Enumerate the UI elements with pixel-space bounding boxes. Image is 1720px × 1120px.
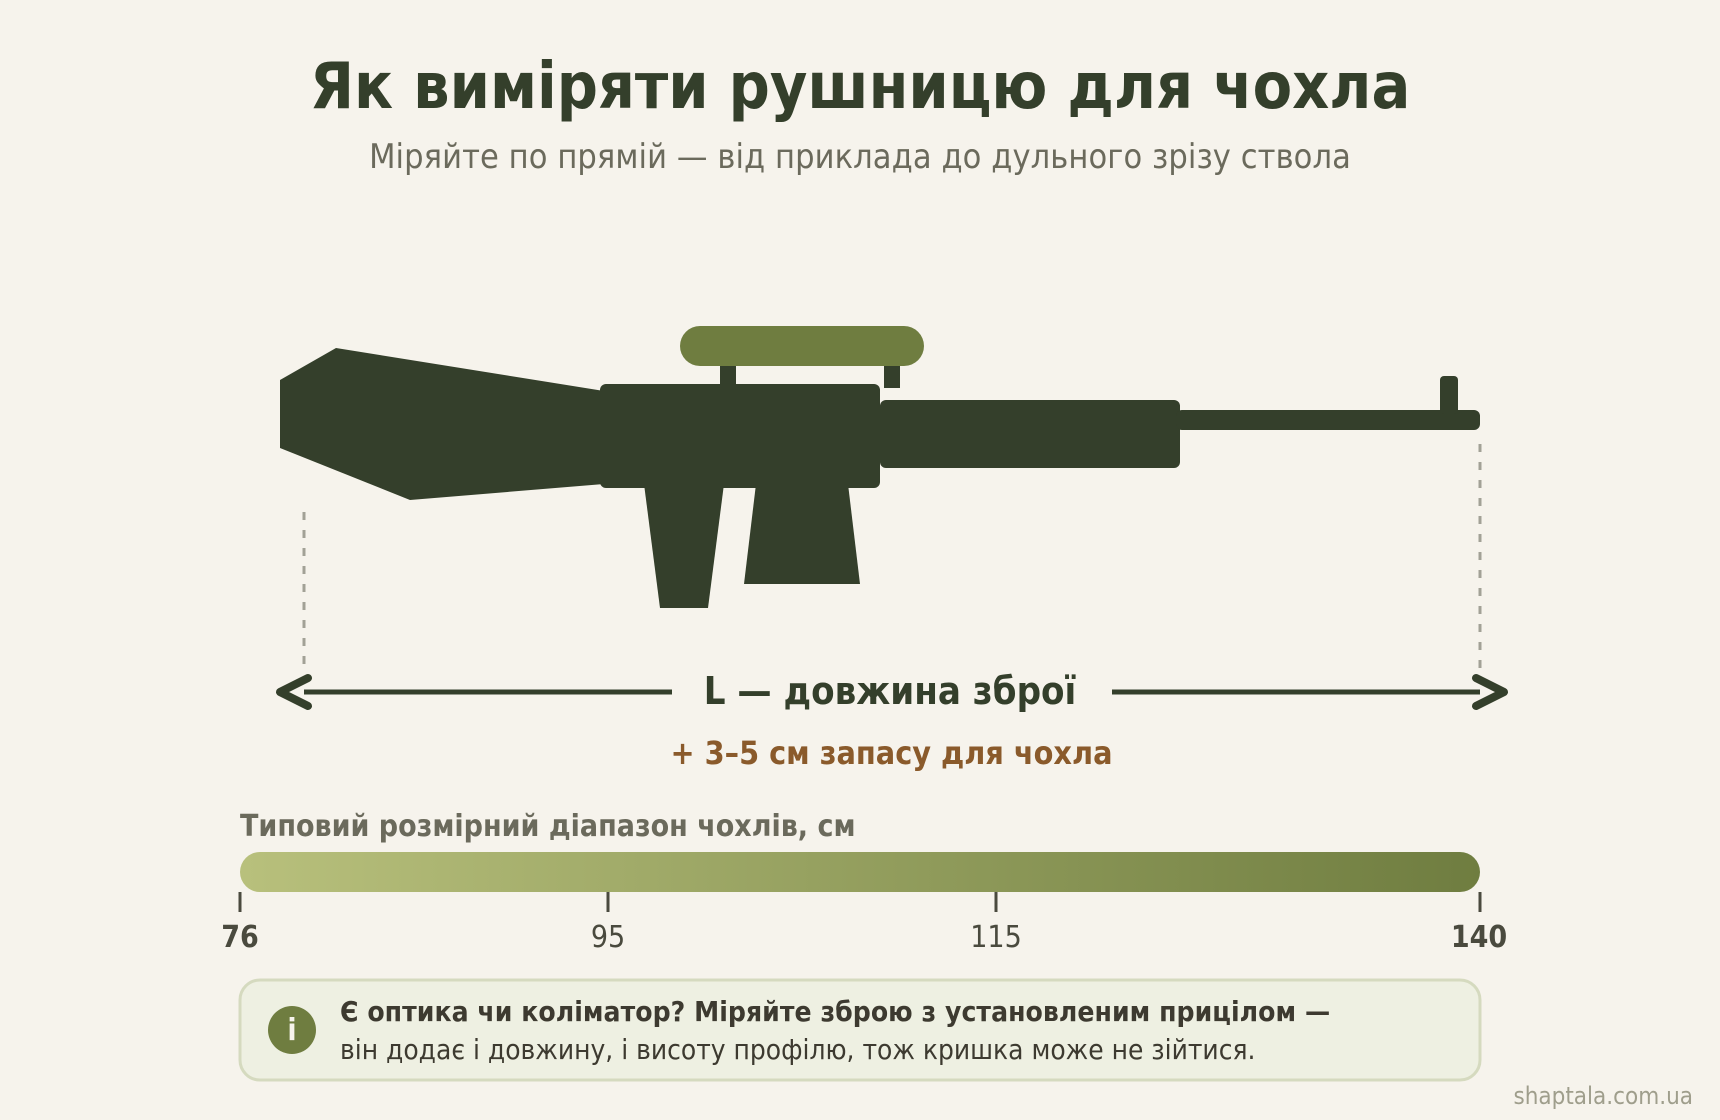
magazine [744,484,860,584]
scale ticks and labels: 76 [221,920,259,955]
icon: rifle silhouette [280,326,1480,608]
right dashed guide [1478,444,1482,672]
arrow: length left [280,678,672,706]
callout [240,980,1480,1080]
length label: L — довжина зброї [704,669,1077,713]
icon: info [268,1006,316,1054]
callout text: він додає і довжину, і висоту профілю, тож кришка може не зійтися. [340,1033,1255,1066]
rifle scope [680,326,924,366]
handguard [880,400,1180,468]
left dashed guide [302,512,306,672]
watermark: shaptala.com.ua [1513,1082,1693,1110]
front sight [1440,376,1458,414]
scale ticks and labels: 140 [1451,920,1507,955]
icon: info: i [287,1013,297,1048]
receiver [600,384,880,488]
scale ticks and labels [221,892,1507,955]
callout text [340,995,1330,1066]
size range bar [240,852,1480,892]
subtitle: Міряйте по прямій — від приклада до дульного зрізу ствола [369,137,1351,177]
scope mounts [720,360,900,390]
allowance note: + 3–5 см запасу для чохла [670,734,1112,772]
scale ticks and labels: 95 [591,920,625,955]
rifle stock [280,348,604,500]
arrow: length right [1112,678,1504,706]
callout text: Є оптика чи коліматор? Міряйте зброю з установленим прицілом — [340,995,1330,1028]
scale ticks and labels: 115 [970,920,1022,955]
title: Як виміряти рушницю для чохла [310,50,1410,124]
barrel [1176,410,1480,430]
size range heading: Типовий розмірний діапазон чохлів, см [240,809,856,844]
pistol grip [644,484,724,608]
